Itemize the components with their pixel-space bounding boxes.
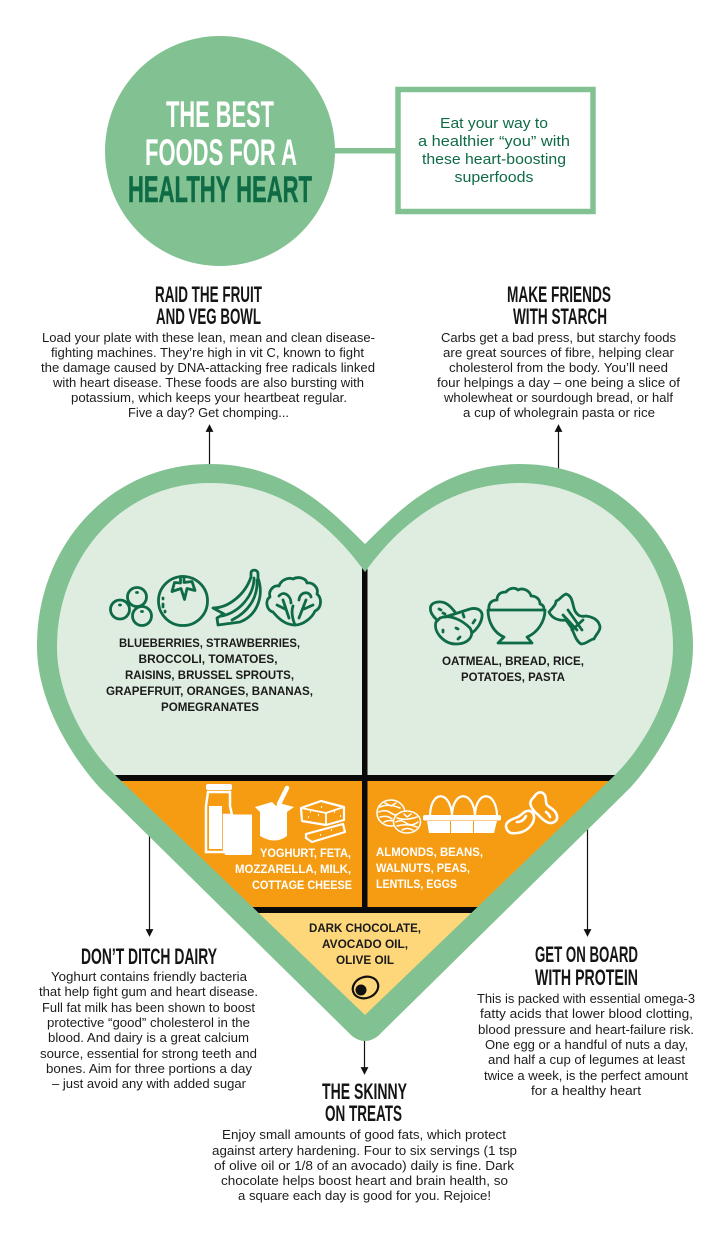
- starch list: OATMEAL, BREAD, RICE,: [442, 654, 584, 668]
- icon: potatoes: [430, 602, 482, 644]
- arrow: protein: [586, 828, 588, 933]
- dairy text block: protective “good” cholesterol in the: [47, 1015, 250, 1030]
- fruit and veg list: BROCCOLI, TOMATOES,: [138, 652, 278, 666]
- fruit and veg text block: [41, 282, 375, 420]
- treats list: OLIVE OIL: [336, 953, 394, 967]
- treats text block: [212, 1079, 517, 1203]
- fruit and veg text block: fighting machines. They’re high in vit C, known to fight: [51, 345, 364, 360]
- protein list: WALNUTS, PEAS,: [376, 861, 470, 875]
- icon: blueberries: [110, 588, 152, 626]
- starch text block: WITH STARCH: [513, 304, 607, 329]
- starch text block: cholesterol from the body. You’ll need: [449, 360, 668, 375]
- protein text block: for a healthy heart: [531, 1083, 641, 1098]
- icon: milk and glass: [206, 784, 252, 855]
- dairy text block: Yoghurt contains friendly bacteria: [51, 969, 248, 984]
- protein text block: blood pressure and heart-failure risk.: [478, 1022, 694, 1037]
- icon: yoghurt pot: [255, 788, 294, 840]
- intro box: these heart-boosting: [422, 151, 566, 168]
- icon: tomato: [158, 576, 208, 626]
- icon: cheese: [301, 801, 345, 842]
- intro box: superfoods: [454, 169, 534, 186]
- dairy text block: – just avoid any with added sugar: [52, 1076, 247, 1091]
- protein list: LENTILS, EGGS: [376, 877, 457, 891]
- protein text block: WITH PROTEIN: [535, 965, 638, 990]
- title: [128, 94, 312, 210]
- title: HEALTHY HEART: [128, 169, 312, 210]
- arrow: treats: [364, 1038, 366, 1071]
- starch list: POTATOES, PASTA: [461, 670, 565, 684]
- intro box: [398, 90, 593, 212]
- dairy text block: DON’T DITCH DAIRY: [81, 944, 217, 969]
- arrow: dairy: [148, 836, 150, 933]
- treats text block: a square each day is good for you. Rejoice!: [238, 1188, 491, 1203]
- heart sections: [40, 470, 690, 1023]
- heart: [37, 464, 693, 1041]
- icon: avocado: [350, 973, 381, 1002]
- dairy text block: bones. Aim for three portions a day: [46, 1061, 252, 1076]
- dairy list: MOZZARELLA, MILK,: [235, 862, 351, 876]
- starch text block: four helpings a day – one being a slice of: [437, 375, 680, 390]
- fruit and veg text block: Load your plate with these lean, mean and clean disease-: [42, 330, 375, 345]
- protein text block: fatty acids that lower blood clotting,: [480, 1006, 693, 1021]
- treats list: [309, 921, 421, 967]
- intro box: a healthier “you” with: [418, 133, 570, 150]
- fruit and veg text block: the damage caused by DNA-attacking free radicals linked: [41, 360, 375, 375]
- fruit and veg text block: Five a day? Get chomping...: [128, 405, 289, 420]
- fruit and veg list: [106, 636, 313, 714]
- starch text block: [437, 282, 680, 420]
- treats text block: Enjoy small amounts of good fats, which protect: [222, 1127, 506, 1142]
- fruit and veg list: BLUEBERRIES, STRAWBERRIES,: [119, 636, 300, 650]
- intro box: Eat your way to: [440, 115, 548, 132]
- fruit and veg text block: with heart disease. These foods are also bursting with: [52, 375, 364, 390]
- fruit and veg list: RAISINS, BRUSSEL SPROUTS,: [125, 668, 294, 682]
- starch text block: a cup of wholegrain pasta or rice: [463, 405, 655, 420]
- arrow: starch: [558, 428, 560, 470]
- dairy list: YOGHURT, FETA,: [260, 846, 351, 860]
- protein list: ALMONDS, BEANS,: [376, 845, 483, 859]
- title circle: [105, 36, 335, 266]
- protein text block: [477, 942, 695, 1098]
- protein text block: GET ON BOARD: [535, 942, 638, 967]
- dairy text block: Full fat milk has been shown to boost: [42, 1000, 255, 1015]
- fruit and veg text block: RAID THE FRUIT: [155, 282, 262, 307]
- connector line: [330, 148, 400, 154]
- fruit and veg text block: potassium, which keeps your heartbeat regular.: [71, 390, 347, 405]
- protein list: [376, 845, 483, 891]
- starch text block: are great sources of fibre, helping clear: [443, 345, 675, 360]
- starch text block: wholewheat or sourdough bread, or half: [443, 390, 673, 405]
- dairy text block: blood. And dairy is a great calcium: [48, 1030, 249, 1045]
- protein text block: twice a week, is the perfect amount: [484, 1068, 688, 1083]
- icon: lettuce: [267, 578, 321, 625]
- treats text block: ON TREATS: [325, 1101, 402, 1126]
- icon: beans: [506, 792, 557, 833]
- fruit and veg list: POMEGRANATES: [161, 700, 259, 714]
- icon: walnuts: [377, 800, 420, 833]
- treats list: DARK CHOCOLATE,: [309, 921, 421, 935]
- protein text block: One egg or a handful of nuts a day,: [485, 1037, 688, 1052]
- starch list: [442, 654, 584, 684]
- starch text block: MAKE FRIENDS: [507, 282, 611, 307]
- treats list: AVOCADO OIL,: [322, 937, 408, 951]
- protein text block: This is packed with essential omega-3: [477, 991, 695, 1006]
- icon: egg carton: [423, 796, 501, 833]
- fruit and veg text block: AND VEG BOWL: [156, 304, 261, 329]
- protein text block: and half a cup of legumes at least: [488, 1052, 685, 1067]
- starch text block: Carbs get a bad press, but starchy foods: [441, 330, 676, 345]
- icon: pasta: [549, 594, 600, 644]
- dairy list: COTTAGE CHEESE: [252, 878, 352, 892]
- arrow: fruit and veg: [208, 428, 210, 465]
- title: THE BEST: [166, 94, 274, 135]
- dairy list: [235, 846, 352, 892]
- treats text block: THE SKINNY: [322, 1079, 407, 1104]
- treats text block: chocolate helps boost heart and brain health, so: [221, 1173, 508, 1188]
- treats text block: of olive oil or 1/8 of an avocado) daily is fine. Dark: [214, 1158, 515, 1173]
- dairy text block: source, essential for strong teeth and: [40, 1046, 257, 1061]
- fruit and veg list: GRAPEFRUIT, ORANGES, BANANAS,: [106, 684, 313, 698]
- icon: rice bowl: [488, 588, 545, 643]
- dairy text block: that help fight gum and heart disease.: [39, 984, 258, 999]
- icon: bananas: [213, 570, 260, 625]
- title: FOODS FOR A: [145, 132, 297, 173]
- treats text block: against artery hardening. Four to six servings (1 tsp: [212, 1143, 517, 1158]
- dairy text block: [39, 944, 258, 1091]
